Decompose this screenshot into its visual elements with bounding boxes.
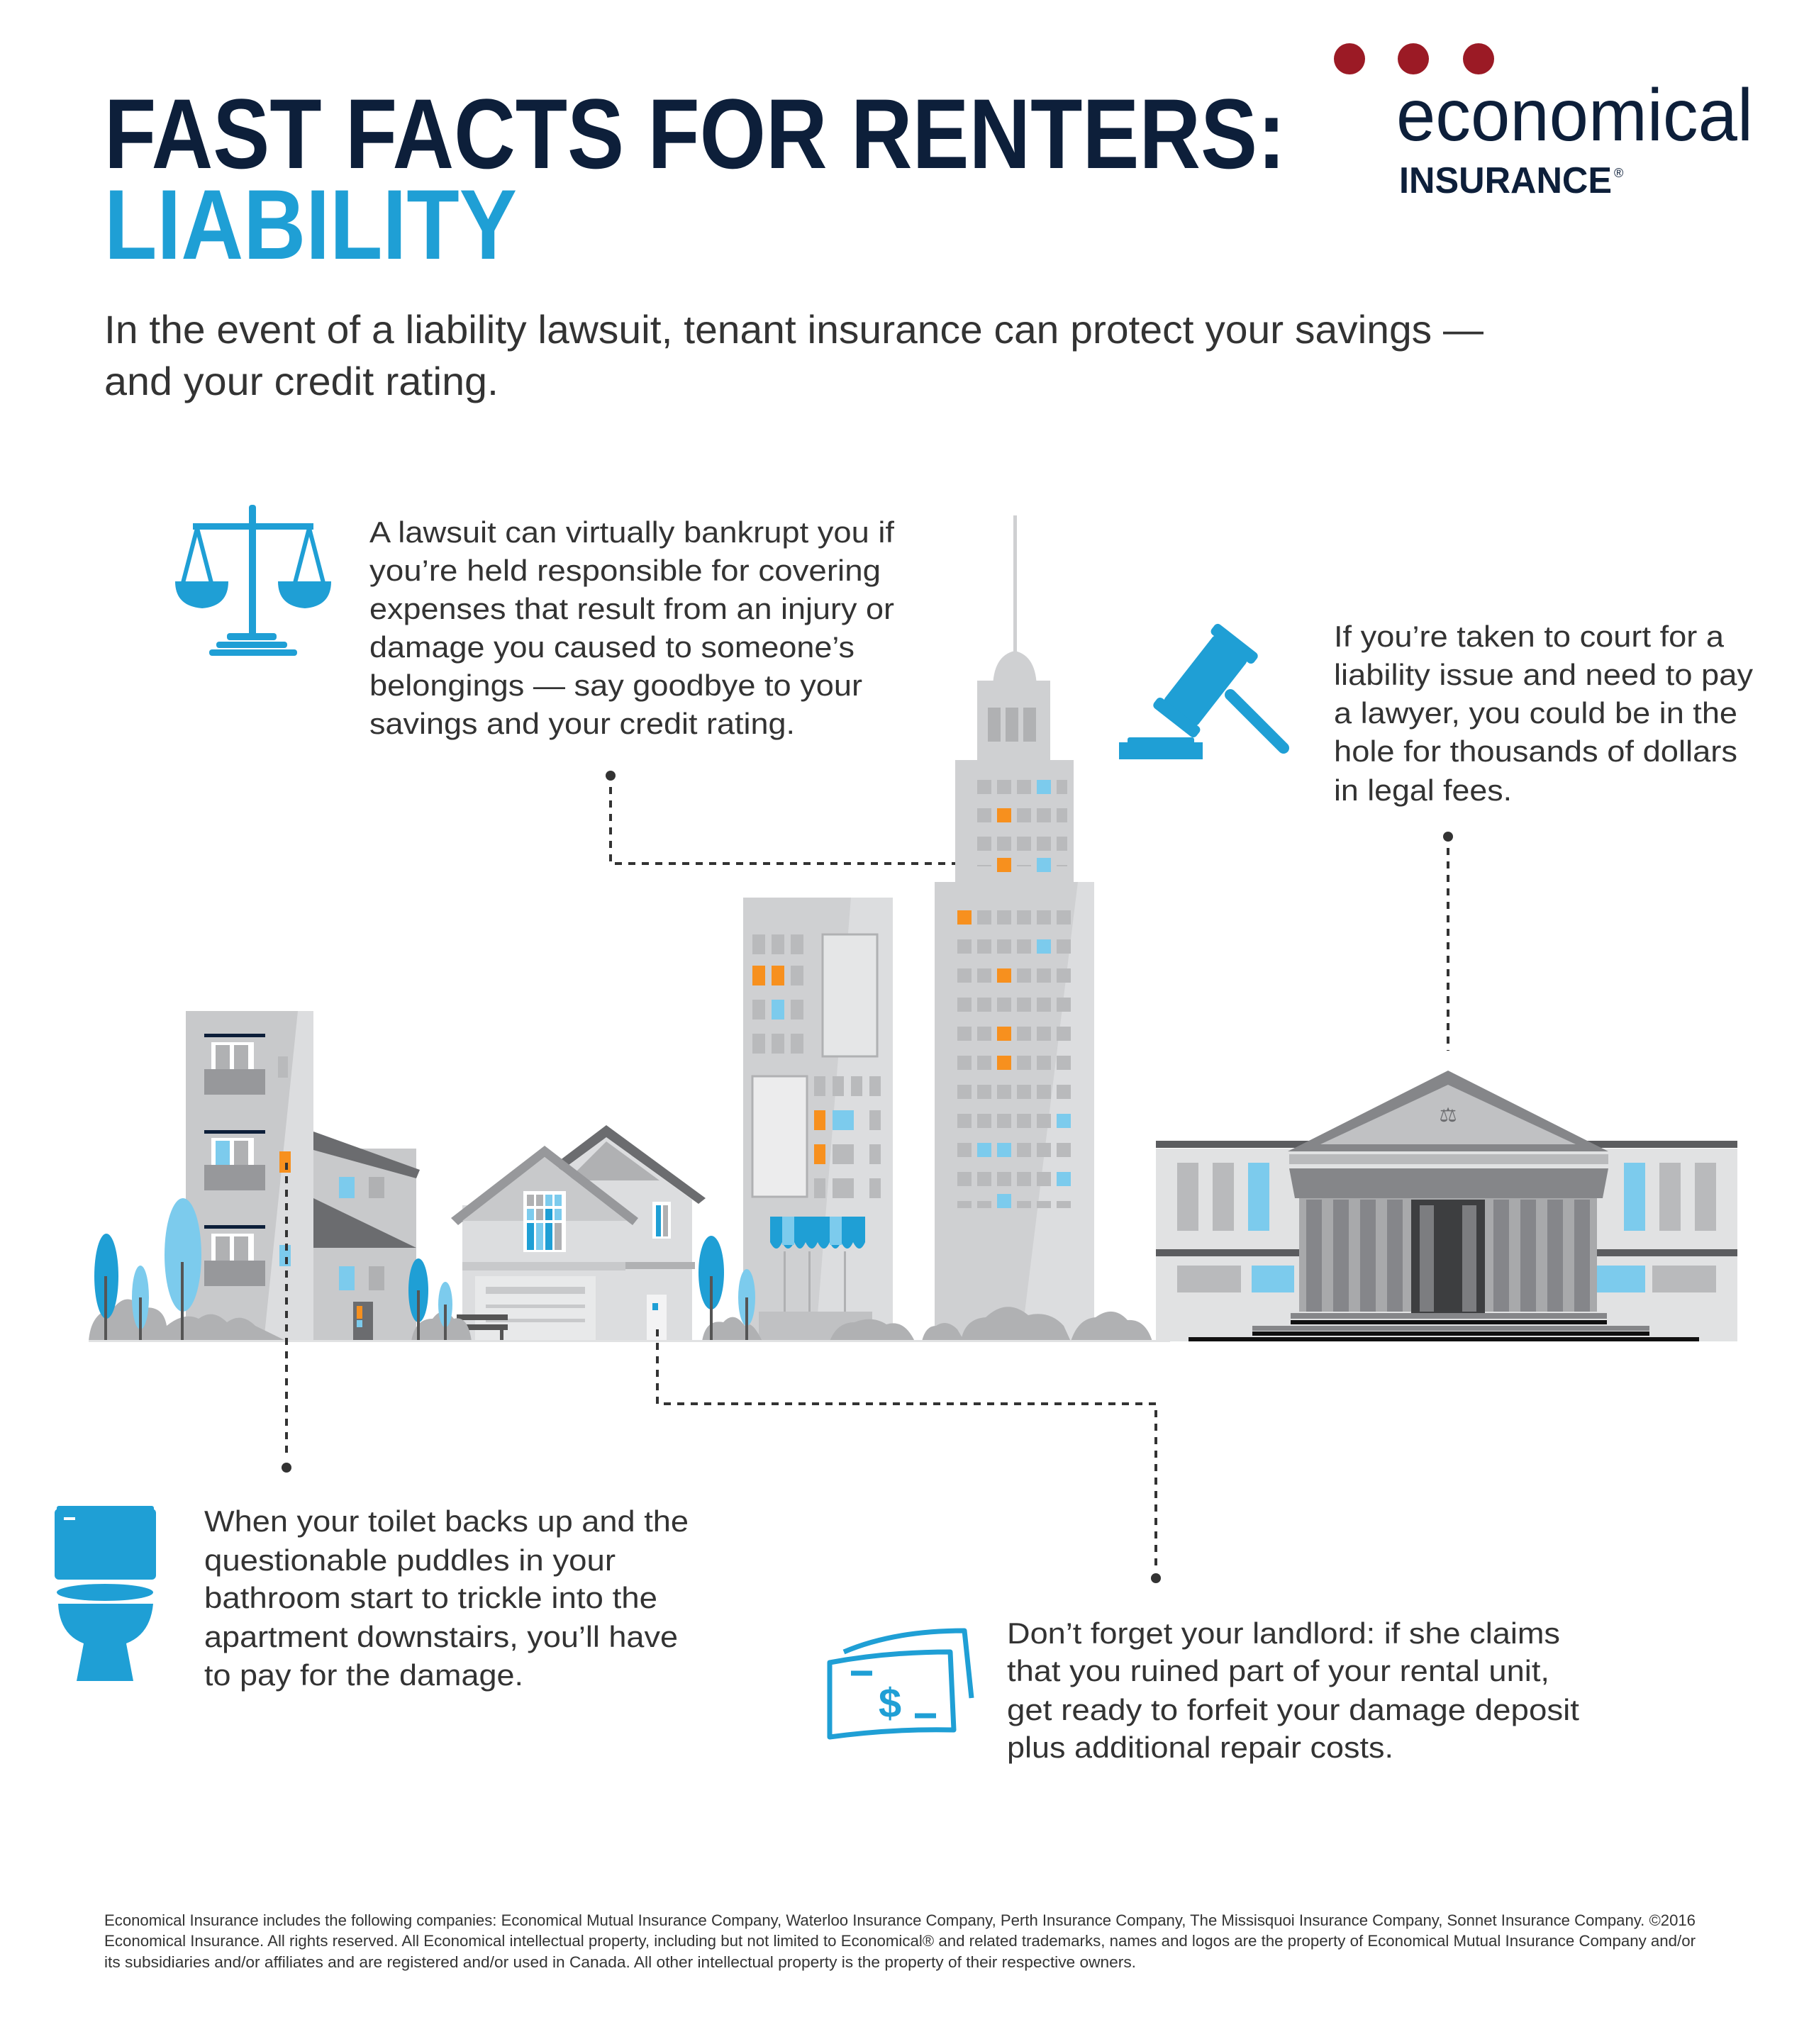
footer disclaimer: Economical Insurance includes the following companies: Economical Mutual Insurance Company, Waterloo Insurance Company, Perth Insurance Company, The Missisquoi Insurance Company, Sonnet Insurance Company. ©2016: [104, 1911, 1696, 1929]
building: courthouse: [1156, 1071, 1737, 1341]
subtitle: [104, 307, 1484, 403]
text block: landlord: that you ruined part of your rental unit,: [1007, 1654, 1549, 1687]
text block: lawsuit: expenses that result from an injury or: [369, 592, 894, 625]
building: center house: [451, 1125, 706, 1341]
dashed connector: landlord: [657, 1329, 1161, 1583]
text block: lawsuit: damage you caused to someone’s: [369, 630, 855, 664]
title: FAST FACTS FOR RENTERS:: [104, 78, 1286, 189]
building: mid glass tower: [743, 898, 893, 1341]
building: skyscraper: [935, 515, 1094, 1341]
text block: lawyer: [1334, 620, 1753, 807]
footer disclaimer: Economical Insurance. All rights reserved. All Economical intellectual property, including but not limited to Economical® and related trademarks, names and logos are the property of Economical Mutual Insurance Company and/or: [104, 1932, 1696, 1950]
text block: lawsuit: savings and your credit rating.: [369, 707, 795, 740]
logo: economical insurance: INSURANCE: [1399, 160, 1612, 201]
building: small house with dark roof: [313, 1132, 420, 1341]
logo: economical insurance: ®: [1614, 166, 1623, 180]
dashed connector: toilet: [282, 1163, 291, 1473]
text block: lawsuit: you’re held responsible for covering: [369, 554, 881, 587]
text block: toilet: to pay for the damage.: [204, 1658, 523, 1692]
icon: toilet: [55, 1506, 156, 1681]
logo: economical insurance: [1334, 43, 1753, 201]
building: left apartment block: [186, 1011, 313, 1341]
text block: toilet: [204, 1504, 689, 1692]
dashed connector: court: [1443, 832, 1453, 1051]
text block: toilet: When your toilet backs up and the: [204, 1504, 689, 1538]
subtitle: In the event of a liability lawsuit, tenant insurance can protect your savings —: [104, 307, 1484, 352]
cityscape: [89, 515, 1737, 1342]
footer disclaimer: [104, 1911, 1696, 1971]
text block: lawyer: in legal fees.: [1334, 774, 1512, 807]
text block: landlord: get ready to forfeit your damage deposit: [1007, 1693, 1579, 1726]
trees and bushes: [89, 1198, 1152, 1341]
icon: money bills: [830, 1631, 972, 1737]
text block: lawsuit: belongings — say goodbye to your: [369, 669, 862, 702]
subtitle: and your credit rating.: [104, 359, 499, 403]
text block: lawyer: If you’re taken to court for a: [1334, 620, 1725, 653]
footer disclaimer: its subsidiaries and/or affiliates and are registered and/or used in Canada. All other intellectual property is the property of their respective owners.: [104, 1953, 1136, 1971]
text block: lawyer: liability issue and need to pay: [1334, 658, 1753, 691]
text block: lawsuit: A lawsuit can virtually bankrupt you if: [369, 515, 894, 549]
icon: money bills: $: [879, 1680, 901, 1726]
text block: toilet: apartment downstairs, you’ll have: [204, 1620, 678, 1653]
text block: landlord: Don’t forget your landlord: if she claims: [1007, 1616, 1560, 1650]
text block: landlord: [1007, 1616, 1579, 1764]
text block: lawsuit: [369, 515, 894, 740]
icon: gavel: [1119, 622, 1284, 759]
title: LIABILITY: [104, 169, 517, 280]
text block: lawyer: hole for thousands of dollars: [1334, 735, 1737, 768]
logo: economical insurance: economical: [1396, 74, 1753, 157]
icon: scales of justice: [175, 505, 331, 656]
text block: lawyer: a lawyer, you could be in the: [1334, 696, 1737, 730]
text block: toilet: questionable puddles in your: [204, 1543, 616, 1577]
dashed connector: lawsuit to tower: [606, 771, 1044, 864]
text block: toilet: bathroom start to trickle into the: [204, 1581, 657, 1614]
text block: landlord: plus additional repair costs.: [1007, 1731, 1393, 1764]
title: [104, 78, 1286, 280]
building: courthouse: ⚖: [1439, 1104, 1457, 1126]
